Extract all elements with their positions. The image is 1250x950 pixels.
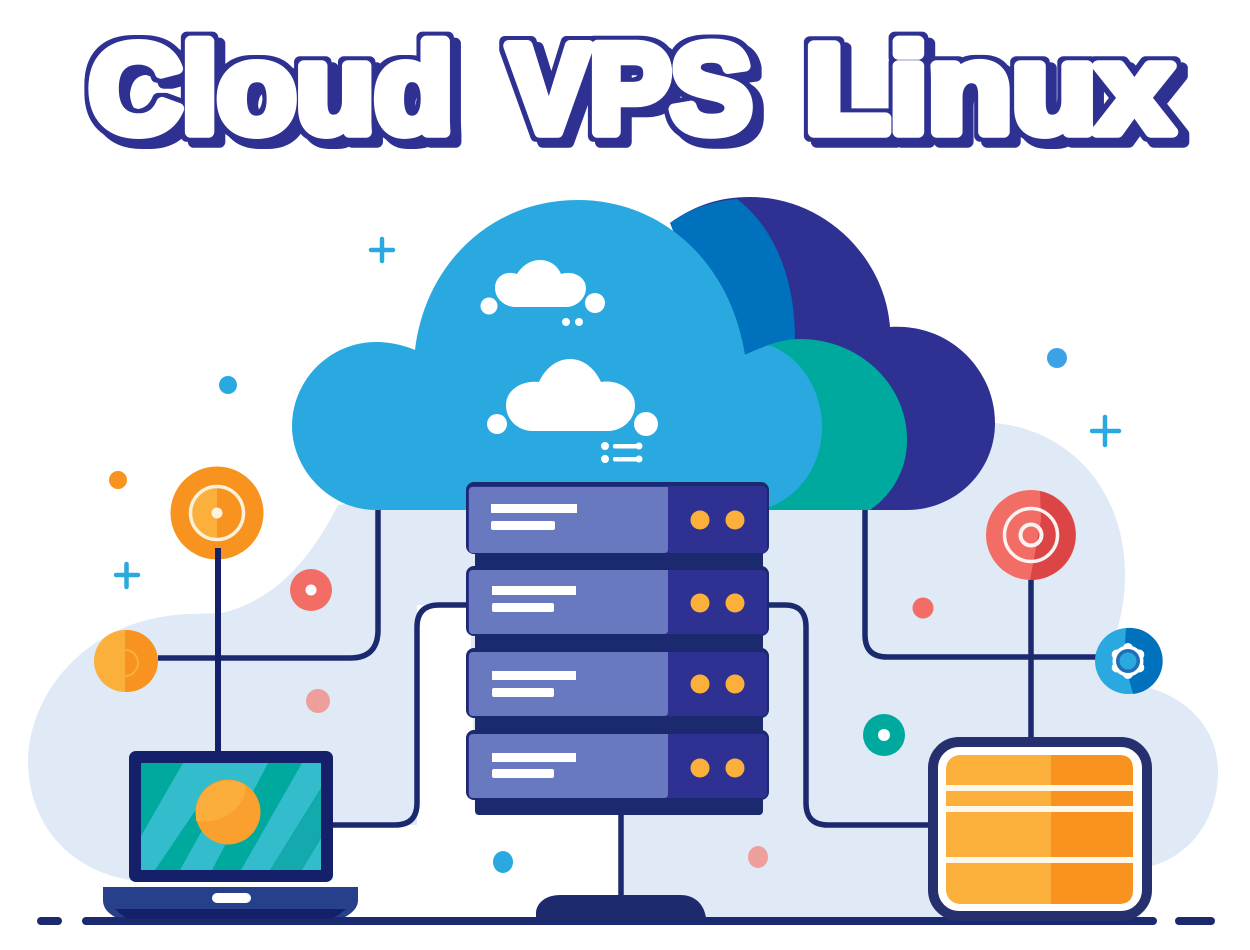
icon: orange target (170, 466, 264, 752)
icon: small cloud (480, 260, 605, 326)
title: Linux (805, 20, 1173, 159)
icon: large cloud (487, 359, 658, 463)
screen disc (196, 780, 260, 844)
background blob (28, 423, 1218, 917)
icon: red dot ring (290, 569, 332, 611)
title: VPS (508, 20, 752, 159)
icon: gear (1095, 628, 1163, 694)
title (89, 20, 1173, 159)
connector lines (158, 510, 1097, 897)
plus icons (116, 239, 1119, 587)
title: Cloud (89, 20, 453, 159)
storage unit (933, 742, 1147, 916)
ground line (37, 917, 1215, 925)
laptop (103, 751, 358, 919)
server unit 2 (466, 566, 769, 636)
icon: red target (986, 490, 1076, 580)
screen stripes (141, 763, 321, 870)
server unit 1 (466, 482, 769, 554)
cloud shade (670, 199, 795, 355)
back cloud (670, 197, 995, 510)
screen shade (270, 790, 321, 870)
server unit 3 (466, 648, 769, 718)
icon: teal dot ring (863, 714, 905, 756)
server stand (536, 895, 706, 918)
server unit 4 (466, 730, 769, 800)
server rack (466, 482, 769, 815)
main cloud (292, 200, 822, 510)
teal cloud lobe (750, 339, 907, 510)
icon: orange half circle (94, 630, 158, 692)
decorative dots (109, 348, 1067, 873)
